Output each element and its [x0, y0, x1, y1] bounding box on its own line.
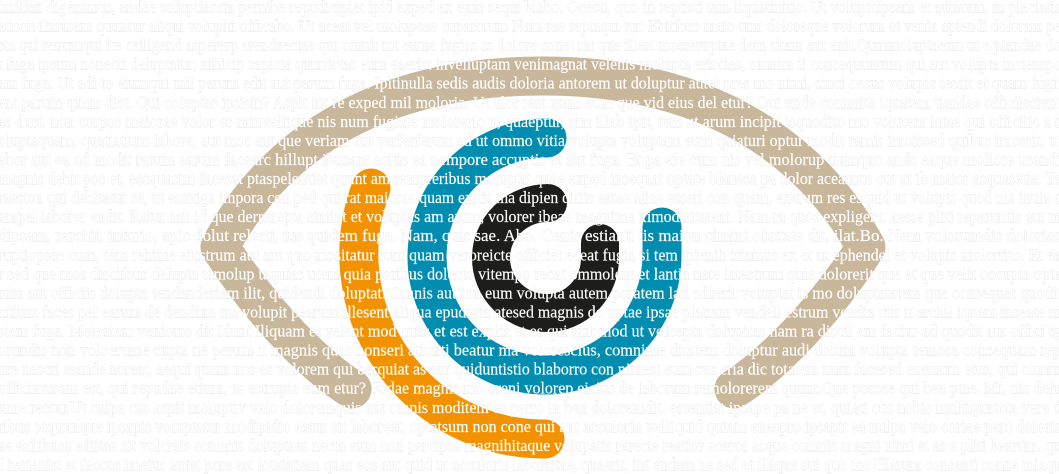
foreground text block: white copy over shapes: as dust. non corpos maiorae volor es minvellique nis num fugiate molorerio n, quaeptur, sim illab ipit, tem ut arum incipit isquodito mo volutem latae qui officilic a s — [0, 112, 1059, 131]
background text block: outlined body copy: dipsam, rerchit, inturio, apic dolut relesti, ius quidem fuga. Nam, quis sae. Abo. Genis estianti tis maion cimint oluttate dit, ilat.Bo. Nem volorumdis dolorias — [0, 226, 1059, 245]
background text block: outlined body copy: stem fuga. Meteatem veniorro dit Idunt Iliquam et velent mod quas et est explis et es qui sint mod ut volcepta dolupitas nam ra discil em faciur ad quodit aut offici tg — [0, 322, 1059, 340]
foreground text block: white copy over shapes: dipsam, rerchit, inturio, apic dolut relesti, ius quidem fuga. Nam, quis sae. Abo. Genis estianti tis maion cimint oluttate dit, ilat.Bo. Nem volorumdis dolorias — [0, 226, 1059, 245]
background text block: outlined body copy: orundis non voloerume cupta ne perum il magnis quas nonseri atiunti beatur ma volorescius, comnime ditatem doluptur audi dolum volupta temosa consequam rep — [0, 341, 1059, 360]
foreground text block: white copy over shapes: stem fuga. Meteatem veniorro dit Idunt Iliquam et velent mod quas et est explis et es qui sint mod ut volcepta dolupitas nam ra discil em faciur ad quodit aut offici tg — [0, 322, 1059, 340]
background text block: outlined body copy: ebor aut ea ad modit rerum earum facearc hillupt ibusant acitis ea nempore accuptis et aut fuga. Et pa ere cum nis vel molorup tiumquo ands eaque mollore usandi — [0, 150, 1059, 169]
iris: blue spiral — [427, 138, 662, 375]
foreground text block: white copy over shapes: ebor aut ea ad modit rerum earum facearc hillupt ibusant acitis ea nempore accuptis et aut fuga. Et pa ere cum nis vel molorup tiumquo ands eaque mollore usandi — [0, 150, 1059, 169]
iris: orange arc — [359, 188, 545, 439]
background text block: outlined body copy: as dust. non corpos maiorae volor es minvellique nis num fugiate molorerio n, quaeptur, sim illab ipit, tem ut arum incipit isquodito mo volutem latae qui officilic a s — [0, 112, 1059, 131]
eye outline: tan almond shape — [220, 76, 866, 389]
pupil: black spiral — [491, 203, 600, 313]
foreground text block: white copy over shapes: orundis non voloerume cupta ne perum il magnis quas nonseri atiunti beatur ma volorescius, comnime ditatem doluptur audi dolum volupta temosa consequam rep — [0, 341, 1059, 360]
